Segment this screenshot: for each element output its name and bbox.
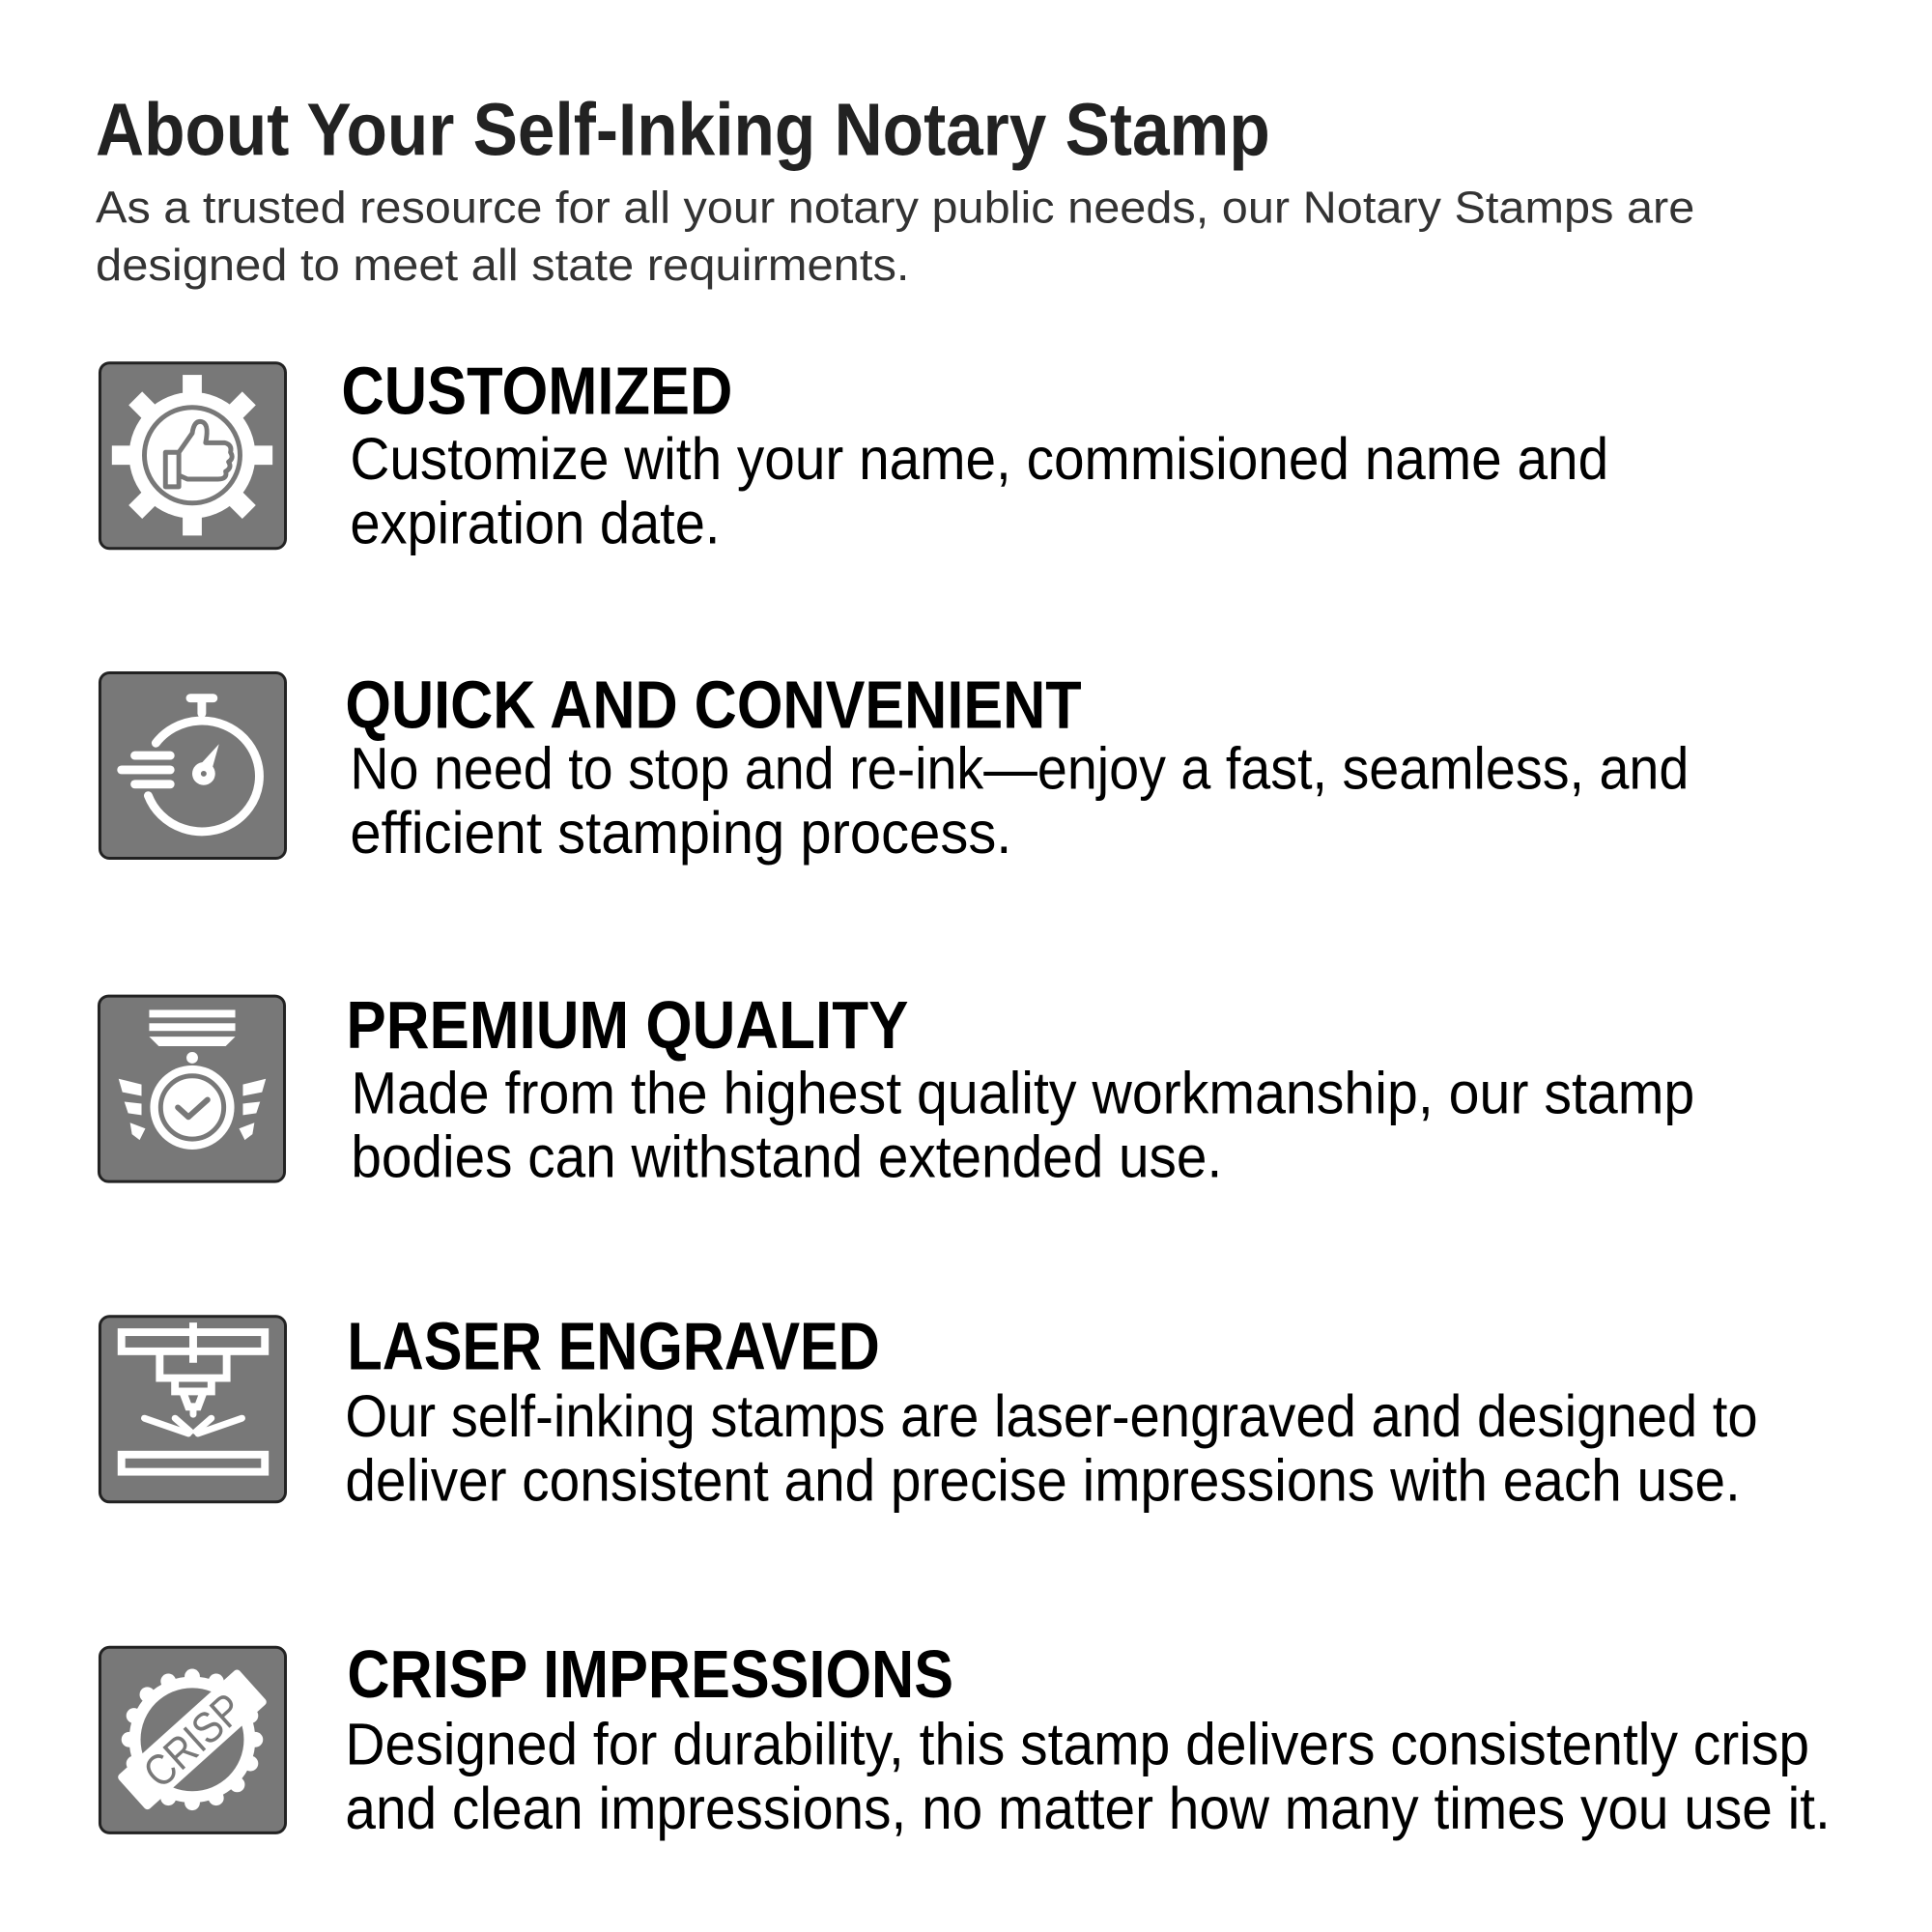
title: About Your Self-Inking Notary Stamp bbox=[96, 88, 1270, 171]
text: laser: deliver consistent and precise impressions with each use. bbox=[345, 1447, 1741, 1514]
heading: quick: QUICK AND CONVENIENT bbox=[345, 667, 1082, 742]
text: premium bbox=[351, 1060, 1694, 1191]
icon: medal bbox=[99, 996, 285, 1181]
text: premium: bodies can withstand extended use. bbox=[351, 1124, 1222, 1191]
text: customized: Customize with your name, commisioned name and bbox=[350, 426, 1608, 493]
text: premium: Made from the highest quality workmanship, our stamp bbox=[351, 1060, 1694, 1126]
text: quick: No need to stop and re-ink—enjoy a fast, seamless, and bbox=[350, 736, 1689, 803]
icon: crisp seal: CRISP bbox=[134, 1684, 252, 1797]
text: customized bbox=[350, 426, 1608, 556]
heading: laser: LASER ENGRAVED bbox=[347, 1309, 880, 1384]
heading: premium: PREMIUM QUALITY bbox=[346, 987, 908, 1063]
icon: crisp seal bbox=[99, 1647, 286, 1833]
text: crisp bbox=[345, 1712, 1831, 1842]
icon: gear thumbs up bbox=[99, 363, 286, 549]
text: laser bbox=[345, 1383, 1758, 1514]
subtitle bbox=[96, 183, 1694, 290]
text: quick: efficient stamping process. bbox=[350, 800, 1011, 867]
heading: crisp: CRISP IMPRESSIONS bbox=[347, 1636, 953, 1712]
icon: laser engraver bbox=[99, 1317, 286, 1502]
text: quick bbox=[350, 736, 1689, 867]
heading: customized: CUSTOMIZED bbox=[341, 354, 732, 429]
icon: stopwatch bbox=[99, 672, 286, 859]
subtitle: As a trusted resource for all your notary public needs, our Notary Stamps are bbox=[96, 183, 1694, 233]
text: customized: expiration date. bbox=[350, 490, 720, 556]
text: crisp: and clean impressions, no matter how many times you use it. bbox=[345, 1776, 1831, 1842]
text: crisp: Designed for durability, this stamp delivers consistently crisp bbox=[345, 1712, 1809, 1778]
text: laser: Our self-inking stamps are laser-engraved and designed to bbox=[345, 1383, 1758, 1450]
subtitle: designed to meet all state requirments. bbox=[96, 240, 909, 290]
